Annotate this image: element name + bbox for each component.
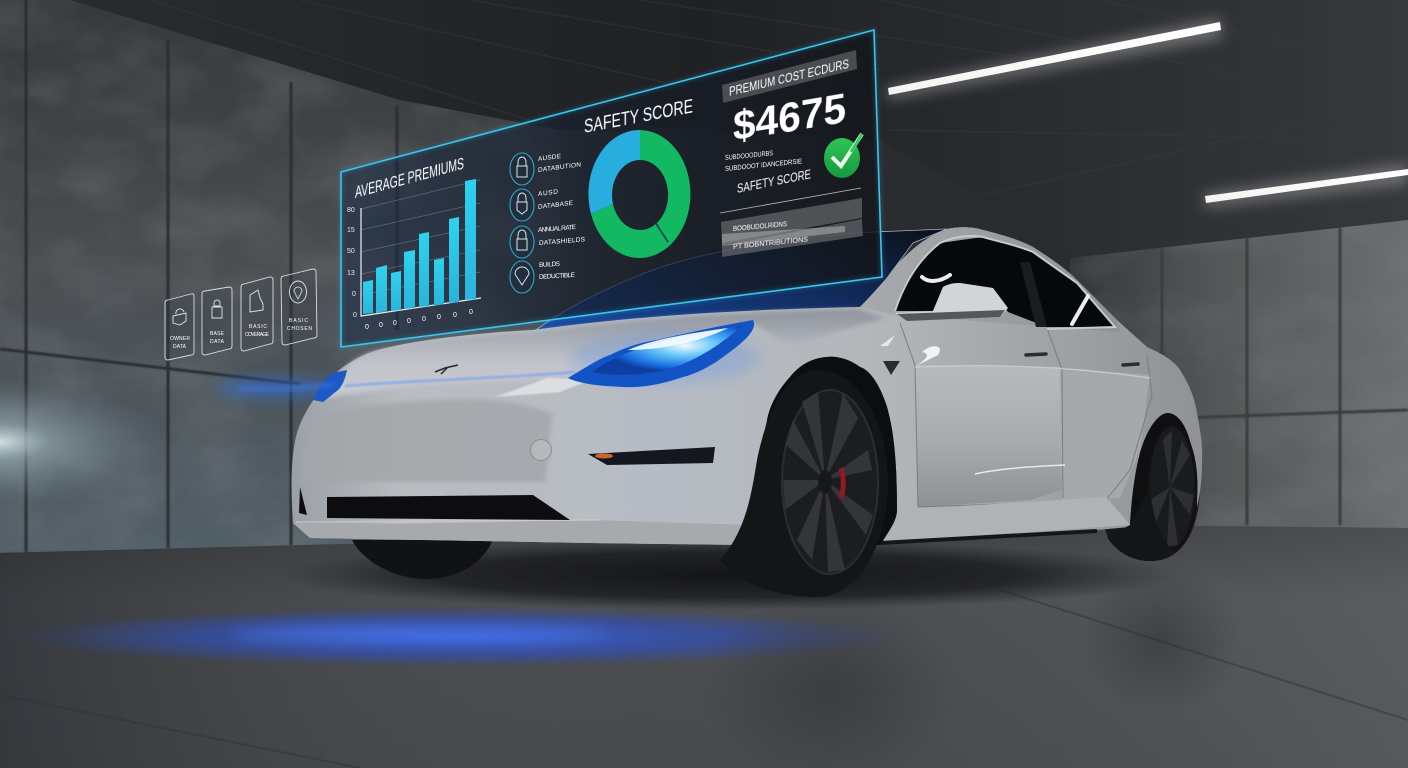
front rim (782, 390, 878, 574)
door handles (1026, 354, 1138, 365)
bumper lower lip (293, 520, 752, 545)
x axis labels: 0 (422, 316, 426, 323)
feature 1: DATABUTION (538, 161, 581, 174)
window frame (895, 236, 1115, 329)
rear wheel arch (1130, 413, 1197, 530)
feature 3 (510, 224, 586, 258)
rocker sill (880, 497, 1130, 542)
x axis labels: 0 (437, 314, 441, 321)
feature 3: ANNUAL RATE (538, 224, 577, 234)
feature list (510, 153, 586, 293)
coverage details (725, 150, 802, 173)
blue wall glow beside headlight (215, 378, 335, 398)
feature 3: DATASHIELDS (539, 236, 586, 247)
tow hook cover (530, 440, 552, 460)
feature 2: DATABASE (538, 200, 574, 211)
front tyre (720, 370, 888, 597)
wheel arch shadow (767, 357, 897, 545)
panel glow outline (341, 30, 882, 347)
hood emblem (435, 365, 458, 374)
y axis labels: 80 (347, 207, 355, 214)
card 2 (202, 287, 232, 355)
back wall behind car (470, 115, 1075, 545)
bar chart (347, 179, 481, 331)
coverage details: SUBDOOODURBS (725, 150, 773, 162)
heading: safety score: SAFETY SCORE (584, 96, 693, 138)
main headlight (568, 320, 760, 387)
side mirror (895, 283, 1008, 320)
card 4: CHOSEN (287, 326, 312, 332)
door reflection (975, 465, 1065, 474)
x axis labels: 0 (453, 312, 457, 319)
hood highlight (495, 378, 590, 397)
card 4 (281, 269, 317, 345)
feature 1: AUSDE (538, 153, 562, 163)
card 4: BASIC (289, 318, 308, 324)
blue light bar on hood (345, 372, 575, 386)
feature 4: DEDUCTIBLE (539, 272, 576, 281)
fender highlights (916, 346, 940, 366)
card 1: DATA (173, 344, 187, 350)
rear rim (1148, 425, 1196, 549)
rim spokes (783, 392, 873, 572)
feature 4 (510, 261, 576, 293)
red brake caliper (841, 468, 843, 498)
chart grid lines (361, 180, 480, 295)
panel outline (341, 30, 882, 347)
floor (0, 526, 1408, 768)
holographic dashboard panel (341, 30, 882, 347)
feature 1 (510, 153, 581, 185)
x axis labels: 0 (365, 324, 369, 331)
card 3 (241, 277, 273, 351)
left concrete wall (0, 0, 690, 553)
status bars: BOOBUDOLRIDNS (733, 221, 787, 233)
coverage details: SUBDOOOT IDANCEDRSIE (725, 158, 802, 173)
status bars (721, 198, 863, 257)
divider (720, 188, 861, 213)
donut chart (588, 130, 690, 258)
background: garage ceiling (0, 0, 1408, 300)
feature 2: AUSD (538, 189, 558, 198)
car (292, 227, 1202, 597)
feature 4: BUILDS (539, 261, 561, 269)
x axis labels: 0 (379, 322, 383, 329)
chart axes (361, 208, 481, 316)
card 1: OWNER (170, 336, 190, 342)
x axis labels: 0 (469, 309, 473, 316)
y axis labels: 50 (347, 248, 355, 255)
rear door panel (1060, 367, 1150, 500)
body crease highlight (915, 366, 1150, 378)
window glass (895, 237, 1115, 327)
far front tyre (352, 540, 493, 579)
status bars: PT BOBNTRIBUTIONS (733, 236, 808, 251)
x axis labels: 0 (393, 320, 397, 327)
car shadow and floor reflection (280, 540, 1240, 768)
fog lamp strip (588, 447, 715, 465)
feature 2 (510, 189, 574, 221)
x axis labels (365, 309, 473, 331)
windshield (533, 229, 947, 332)
cost label bar (722, 50, 857, 103)
hood surface (322, 309, 885, 398)
roof pillar (860, 227, 1120, 332)
fender badge (883, 361, 900, 375)
y axis labels: 0 (353, 312, 357, 319)
blue floor light reflection (20, 607, 900, 667)
front door panel (915, 365, 1062, 507)
y axis labels (347, 207, 357, 319)
rear tyre (1105, 410, 1200, 561)
car body main silhouette (292, 227, 1202, 545)
panel glass (341, 30, 882, 347)
wall seams (0, 0, 1408, 552)
rear tyre front section (1107, 487, 1172, 561)
ceiling light strip: lower (1203, 163, 1408, 208)
left wall light glow (0, 380, 165, 504)
card 2: BASE (210, 331, 225, 337)
nose panel (300, 400, 553, 482)
door seams (900, 323, 1152, 507)
card 2: DATA (210, 339, 225, 345)
y axis labels: 0 (352, 291, 356, 298)
left headlight (313, 370, 347, 402)
blue headlight beam on wall (240, 384, 335, 389)
bars (363, 179, 476, 314)
y axis labels: 13 (347, 270, 355, 277)
safety score label: SAFETY SCORE (737, 166, 811, 196)
x axis labels: 0 (407, 318, 411, 325)
y axis labels: 15 (347, 227, 355, 234)
ceiling light strip: upper (885, 18, 1222, 100)
window reflections (922, 275, 1088, 324)
card 3: BASIC (249, 324, 267, 330)
amber marker (595, 454, 613, 458)
premium value: $4675 (733, 84, 846, 150)
check badge (824, 134, 862, 178)
concrete mottling texture (0, 0, 1408, 550)
side intake (299, 487, 307, 515)
B pillar (1020, 262, 1047, 327)
right concrete wall (1070, 220, 1408, 530)
small icon cards (165, 269, 317, 360)
card 3: COVERAGE (245, 332, 270, 338)
ceiling concrete beams (150, 0, 1408, 200)
heading: average premiums: AVERAGE PREMIUMS (355, 153, 464, 202)
cost label bar: PREMIUM COST ECDURS (729, 56, 849, 99)
front grille (327, 495, 570, 520)
card 1 (165, 294, 194, 360)
